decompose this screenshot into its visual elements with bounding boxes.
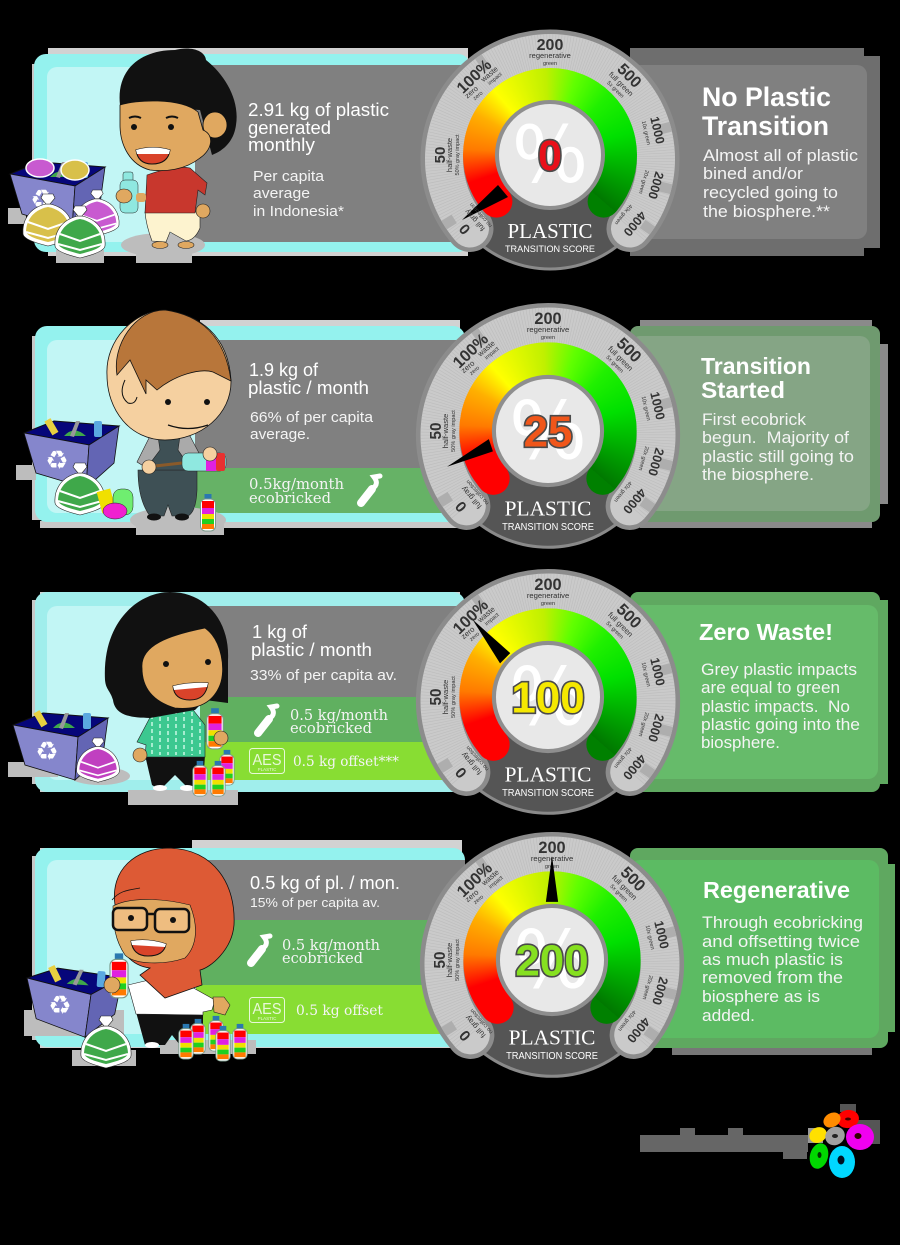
row 1: gauge score 0: 5x green xyxy=(605,80,625,100)
row 2: gauge score 25: 0 xyxy=(452,497,471,515)
row 1: description text: the biosphere.** xyxy=(703,202,830,221)
row 4: gauge score 200: 4000 xyxy=(624,1014,653,1046)
row 3: consumption text: 1 kg of xyxy=(252,622,308,642)
row 3: gauge score 100: 5x green xyxy=(605,621,624,640)
row 4: gauge score 200: 200 xyxy=(538,839,566,857)
row 4: gauge score 200: 50% gray impact xyxy=(455,939,461,981)
row 2: gauge score 25: PLASTIC xyxy=(505,497,591,521)
row 2: gauge score 25: 500 xyxy=(613,334,645,366)
row 3: gauge score 100: zero xyxy=(469,631,481,643)
row 3: gauge score 100: PLASTIC xyxy=(505,763,591,787)
row 4: gauge score 200: 50 xyxy=(432,952,449,968)
row 3: gauge score 100: 10x green xyxy=(640,662,651,687)
row 3: gauge score 100: impact xyxy=(484,612,501,627)
row 4: gauge score 200: 40x green xyxy=(616,1009,637,1032)
row 1: gauge score 0: 1000 xyxy=(647,115,667,145)
row 3: description text: Zero Waste! xyxy=(699,619,833,645)
row 3: gauge score 100: half-waste xyxy=(441,680,450,714)
row 3: gauge score 100: 4000 xyxy=(620,751,649,783)
row 2: description text: the biosphere. xyxy=(702,465,814,484)
row 1: consumption text: generated xyxy=(248,118,331,138)
row 3: gauge score 100: green xyxy=(541,601,555,607)
row 4: consumption text xyxy=(250,873,400,1022)
row 3: gauge score 100: no collection xyxy=(465,744,490,772)
row 4: gauge score 200: impact xyxy=(488,875,505,890)
row 3: character and waste: ♻ xyxy=(35,737,59,767)
row 1: gauge score 0: green xyxy=(543,61,557,67)
row 1: gauge score 0: 100% xyxy=(454,57,495,97)
row 1: gauge score 0: waste xyxy=(478,64,500,84)
row 2: character and waste: ♻ xyxy=(45,446,69,476)
row 1: description text: recycled going to xyxy=(703,183,838,202)
row 4: right panel xyxy=(630,848,895,1055)
row 3: consumption text: 0.5 kg/month xyxy=(290,706,388,724)
row 2: description text xyxy=(701,353,854,484)
row 4: description text: Regenerative xyxy=(703,877,850,903)
row 4: description text: and offsetting twice xyxy=(702,932,860,951)
row 2: gauge score 25: 1000 xyxy=(647,390,668,421)
row 4: consumption text: AES xyxy=(252,1001,282,1018)
row 3: description text: Grey plastic impacts xyxy=(701,660,857,679)
logo wordmark silhouette xyxy=(640,1128,808,1159)
row 1: gauge score 0: 20x green xyxy=(637,169,649,194)
row 4: description text: added. xyxy=(702,1006,755,1025)
row 3: gauge score 100: 40x green xyxy=(612,746,633,769)
row 1: consumption text: 2.91 kg of plastic xyxy=(248,100,389,120)
row 3: consumption text: PLASTIC xyxy=(258,767,277,772)
row 2: gauge score 25: full green xyxy=(606,344,635,373)
row 1: gauge score 0: 0 xyxy=(538,132,562,180)
row 4: description text: removed from the xyxy=(702,968,843,987)
row 1: description text: bined and/or xyxy=(703,164,803,183)
row 4: gauge score 200: 0 xyxy=(456,1026,475,1044)
row 3: consumption text: plastic / month xyxy=(251,640,372,660)
row 3: consumption text: 33% of per capita av. xyxy=(250,667,397,684)
row 3: description text: biosphere. xyxy=(701,733,780,752)
row 2: gauge score 25: 10x green xyxy=(640,396,651,421)
row 2: gauge score 25: half-waste xyxy=(441,414,450,448)
row 3: description text xyxy=(699,619,860,752)
row 2: gauge score 25: green xyxy=(541,335,555,341)
row 2: consumption text: 1.9 kg of xyxy=(249,360,319,380)
row 2: description text: Started xyxy=(701,377,785,403)
row 4: gauge score 200: 500 xyxy=(617,863,649,895)
row 4: gauge score 200: TRANSITION SCORE xyxy=(506,1051,598,1062)
row 4: gauge score 200: zero xyxy=(473,894,485,906)
row 2: gauge score 25: 50% gray impact xyxy=(451,410,457,452)
row 2: consumption text xyxy=(248,360,380,507)
row 2: gauge score 25: 50 xyxy=(428,423,445,439)
row 1: description text xyxy=(702,82,859,221)
row 3: gauge score 100: 500 xyxy=(613,600,645,632)
row 4: description text: biosphere as is xyxy=(702,987,820,1006)
row 3: gauge score 100: regenerative xyxy=(527,591,569,600)
row 3: right panel xyxy=(630,592,888,792)
row 1: gauge score 0: zero xyxy=(463,84,480,100)
row 2: consumption text: plastic / month xyxy=(248,378,369,398)
row 1: character and waste xyxy=(8,48,237,263)
logo flower icon xyxy=(806,1104,880,1178)
row 1: gauge score 0: % xyxy=(513,93,587,205)
row 2: gauge score 25: full gray xyxy=(459,484,484,511)
row 1: consumption text: average xyxy=(253,185,310,202)
row 4: character and waste: ♻ xyxy=(48,991,72,1021)
row 1: gauge score 0: no collection xyxy=(469,201,494,228)
row 2: gauge score 25: waste xyxy=(475,339,497,359)
row 2: gauge score 25: 2000 xyxy=(645,446,667,478)
row 3: gauge score 100: TRANSITION SCORE xyxy=(502,788,594,799)
row 3: left panel xyxy=(32,592,465,792)
row 1: consumption text: in Indonesia* xyxy=(253,203,344,220)
row 1: gauge score 0: 50 xyxy=(432,147,449,163)
row 4: gauge score 200: full green xyxy=(610,873,639,902)
row 3: description text: plastic going into the xyxy=(701,715,860,734)
row 2: consumption text: average. xyxy=(250,426,310,443)
row 2: gauge score 25: 40x green xyxy=(612,480,633,503)
row 1: gauge score 0: 40x green xyxy=(613,203,633,226)
row 2: gauge score 25: zero xyxy=(469,365,481,377)
row 4: gauge score 200: full gray xyxy=(463,1013,488,1040)
row 2: consumption text: ecobricked xyxy=(249,489,331,507)
row 3: description text: are equal to green xyxy=(701,678,840,697)
row 3: gauge score 100: % xyxy=(511,633,585,748)
row 3: gauge score 100: 1000 xyxy=(647,656,668,687)
row 3: gauge score 100: 2000 xyxy=(645,712,667,744)
row 1: consumption text: Per capita xyxy=(253,168,325,185)
row 4: gauge score 200: 5x green xyxy=(609,884,628,903)
row 3: gauge score 100: full green xyxy=(606,610,635,639)
row 1: description text: Transition xyxy=(702,111,829,141)
row 1: gauge score 0: full green xyxy=(607,70,635,98)
row 4: gauge score 200 xyxy=(432,839,677,1076)
row 2: gauge score 25: % xyxy=(511,367,585,482)
row 3: consumption text xyxy=(250,622,399,774)
row 1: gauge score 0: 10x green xyxy=(640,120,651,146)
row 4: gauge score 200: 100% xyxy=(454,859,496,901)
row 3: gauge score 100: 20x green xyxy=(637,711,649,737)
row 4: gauge score 200: 200 xyxy=(515,936,589,985)
row 1: consumption text: monthly xyxy=(248,135,315,155)
row 3: gauge score 100: 100% xyxy=(450,596,492,638)
row 4: consumption text: 0.5 kg of pl. / mon. xyxy=(250,873,400,893)
row 2: gauge score 25: zero xyxy=(459,359,476,375)
row 1: gauge score 0: regenerative xyxy=(529,51,571,60)
row 1: gauge score 0: zero xyxy=(472,90,484,102)
row 4: consumption text: 15% of per capita av. xyxy=(250,895,380,910)
row 2: gauge score 25: 100% xyxy=(450,330,492,372)
row 3: gauge score 100: full gray xyxy=(459,750,484,777)
row 1: gauge score 0: full gray xyxy=(463,207,487,233)
row 1: gauge score 0: 50% gray impact xyxy=(455,134,461,175)
row 3: gauge score 100 xyxy=(428,576,673,813)
row 1: gauge score 0: PLASTIC xyxy=(508,219,592,243)
row 4: gauge score 200: no collection xyxy=(469,1007,494,1035)
row 4: gauge score 200: % xyxy=(515,896,589,1011)
row 4: character and waste xyxy=(23,848,256,1068)
row 4: gauge score 200: 10x green xyxy=(644,925,655,950)
row 1: gauge score 0: 4000 xyxy=(620,208,649,239)
row 2: description text: begun. Majority of xyxy=(702,428,849,447)
row 3: gauge score 100: 50% gray impact xyxy=(451,676,457,718)
row 2: gauge score 25: impact xyxy=(484,346,501,361)
row 4: gauge score 200: 1000 xyxy=(651,919,672,950)
row 1: gauge score 0: 500 xyxy=(613,61,644,92)
row 1: consumption text xyxy=(248,100,389,220)
row 4: gauge score 200: 20x green xyxy=(641,974,653,1000)
row 4: consumption text: 0.5 kg offset xyxy=(296,1003,383,1019)
row 3: description text: plastic impacts. No xyxy=(701,697,850,716)
row 3: gauge score 100: zero xyxy=(459,625,476,641)
row 2: description text: plastic still going to xyxy=(702,447,854,466)
row 4: consumption text: ecobricked xyxy=(282,949,363,967)
row 1: gauge score 0: TRANSITION SCORE xyxy=(505,244,595,255)
row 3: gauge score 100: waste xyxy=(475,605,497,625)
row 1: right panel xyxy=(630,48,880,256)
row 2: gauge score 25: 20x green xyxy=(637,445,649,471)
row 3: gauge score 100: 200 xyxy=(534,576,562,594)
row 2: consumption text: 0.5kg/month xyxy=(249,475,344,493)
row 2: gauge score 25: 4000 xyxy=(620,485,649,517)
row 1: description text: No Plastic xyxy=(702,82,831,112)
row 3: gauge score 100: 100 xyxy=(511,673,585,722)
row 1: left panel xyxy=(32,48,470,256)
row 2: gauge score 25: 200 xyxy=(534,310,562,328)
row 1: character and waste: ♻ xyxy=(30,185,54,215)
row 2: left panel xyxy=(32,320,465,528)
row 4: description text: as much plastic is xyxy=(702,950,843,969)
row 1: gauge score 0 xyxy=(432,37,672,269)
row 1: gauge score 0: impact xyxy=(487,71,504,87)
row 4: description text xyxy=(702,877,863,1025)
row 4: gauge score 200: zero xyxy=(463,888,480,904)
row 1: description text: Almost all of plastic xyxy=(703,146,859,165)
row 3: gauge score 100: 0 xyxy=(452,763,471,781)
row 3: character and waste xyxy=(8,592,238,805)
row 2: gauge score 25: TRANSITION SCORE xyxy=(502,522,594,533)
row 2: right panel xyxy=(630,320,888,528)
row 2: character and waste xyxy=(16,310,231,535)
row 4: gauge score 200: PLASTIC xyxy=(509,1026,595,1050)
row 4: description text: Through ecobricking xyxy=(702,913,863,932)
row 2: gauge score 25: 25 xyxy=(524,407,572,456)
row 3: consumption text: 0.5 kg offset*** xyxy=(293,754,399,770)
row 4: gauge score 200: green xyxy=(545,864,559,870)
row 1: gauge score 0: 0 xyxy=(456,220,474,238)
row 2: gauge score 25: regenerative xyxy=(527,325,569,334)
row 4: gauge score 200: half-waste xyxy=(445,943,454,977)
row 4: gauge score 200: 2000 xyxy=(649,975,671,1007)
row 1: gauge score 0: 2000 xyxy=(645,170,666,201)
row 2: gauge score 25: 5x green xyxy=(605,355,624,374)
row 3: gauge score 100: 50 xyxy=(428,689,445,705)
row 4: left panel xyxy=(32,840,465,1048)
row 1: gauge score 0: half-waste xyxy=(445,138,454,172)
row 4: gauge score 200: waste xyxy=(479,868,501,888)
row 2: consumption text: 66% of per capita xyxy=(250,409,374,426)
row 4: gauge score 200: regenerative xyxy=(531,854,573,863)
row 2: description text: Transition xyxy=(701,353,811,379)
row 2: gauge score 25: no collection xyxy=(465,478,490,506)
row 2: description text: First ecobrick xyxy=(702,410,807,429)
row 1: gauge score 0: 200 xyxy=(537,37,563,54)
row 4: consumption text: PLASTIC xyxy=(258,1016,277,1021)
row 3: consumption text: AES xyxy=(252,752,282,769)
row 2: gauge score 25 xyxy=(428,310,673,547)
row 4: consumption text: 0.5 kg/month xyxy=(282,936,380,954)
row 3: consumption text: ecobricked xyxy=(290,719,372,737)
